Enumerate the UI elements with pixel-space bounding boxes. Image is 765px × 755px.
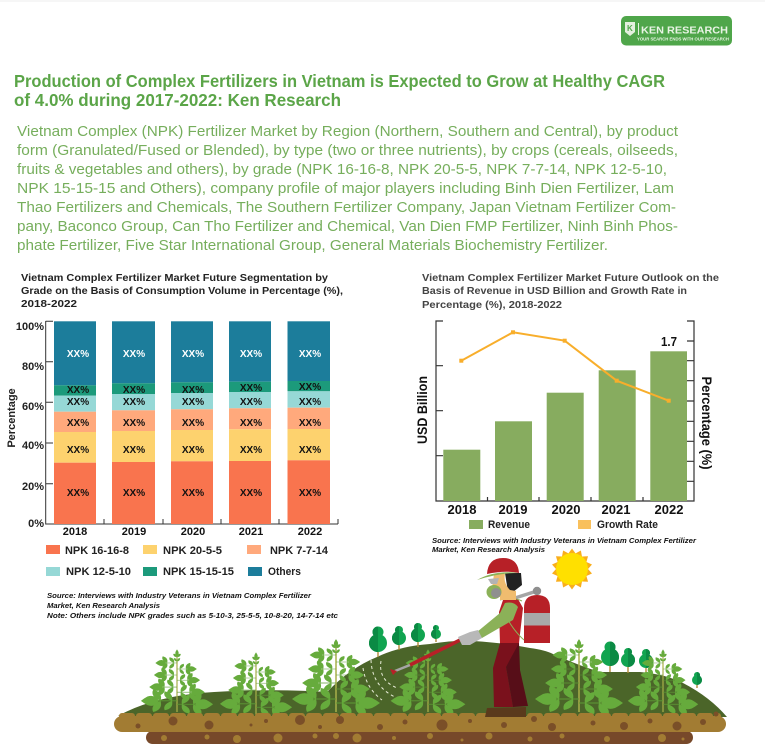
stacked bar 2018: XX% [67,349,89,360]
y axis with percentage labels: 20% [22,481,44,493]
title: of 4.0% during 2017-2022: Ken Research [14,90,341,110]
year labels: 2018 [448,502,476,517]
axes and ticks [436,321,694,501]
stacked bar 2021: XX% [240,397,262,408]
value label 1.7: 1.7 [661,334,677,349]
source note: segmentation: Source: Interviews with Industry Veterans in Vietnam Complex Fertilizer [47,591,312,600]
stacked bar 2020: 2020 [181,526,205,538]
source note: segmentation: Note: Others include NPK grades such as 5-10-3, 25-5-5, 10-8-20, 14-7-14 etc [47,611,339,620]
arm [477,602,518,638]
stacked bar 2019: 2019 [122,526,146,538]
source note: segmentation [47,591,339,620]
stacked bar 2019 [112,321,155,538]
boots [485,707,526,717]
source note: outlook: Source: Interviews with Industry Veterans in Vietnam Complex Fertilizer [432,536,697,545]
stacked bar 2019: XX% [123,385,145,396]
stacked bar 2022: XX% [299,349,321,360]
stacked bar 2021: XX% [240,349,262,360]
description text block: fruits & vegetables and others), by grade (NPK 16-16-8, NPK 20-5-5, NPK 7-7-14, NPK 12-5-10, [17,161,667,178]
trousers [493,643,528,707]
stacked bar 2020: XX% [182,488,204,499]
backpack tank [515,587,550,643]
stacked bar 2018: XX% [67,445,89,456]
legend: NPK grades: Others [268,566,301,578]
stacked bar 2022 [288,321,330,538]
torso [499,599,523,643]
stacked bar 2022: XX% [299,445,321,456]
description text block: pany, Baconco Group, Can Tho Fertilizer and Chemical, Van Dien FMP Fertilizer, Ninh Binh Phos- [17,218,678,235]
stacked bar 2022: 2022 [298,526,322,538]
lower soil layer [146,731,693,744]
stacked bar 2022: XX% [299,488,321,499]
year labels: 2019 [499,502,527,517]
stacked bar 2019: XX% [123,397,145,408]
crop plants [141,639,698,718]
logo: Ken Research: K [627,24,633,33]
year labels: 2021 [602,502,630,517]
illustration: farmer spraying crops on hill [114,548,727,744]
stacked bar 2018 [54,321,96,538]
legend: NPK grades: NPK 7-7-14 [270,545,329,557]
y axis with percentage labels: 60% [22,401,44,413]
y axis with percentage labels: 100% [16,321,44,333]
legend: revenue and growth rate: Growth Rate [597,519,658,531]
stacked bar 2019: XX% [123,488,145,499]
head [477,558,522,600]
hill [118,641,727,717]
stacked bar 2021: XX% [240,488,262,499]
glove [458,630,482,645]
legend: NPK grades: NPK 20-5-5 [163,545,222,557]
stacked bar 2020: XX% [182,397,204,408]
description text block: NPK 15-15-15 and Others), company profile of major players including Binh Dien Fertilizer, Lam [17,180,674,197]
chart heading: outlook: Basis of Revenue in USD Billion and Growth Rate in [422,285,687,297]
stacked bar 2020: XX% [182,445,204,456]
axis title: Percentage: Percentage (%) [699,376,715,470]
stacked bar 2018: XX% [67,418,89,429]
title [14,71,665,110]
chart heading: segmentation [21,272,343,310]
top edge shading [0,0,765,2]
legend: revenue and growth rate: Revenue [488,519,530,531]
logo: Ken Research: KEN RESEARCH [641,24,728,36]
panel: revenue and growth combo chart [414,272,719,554]
year labels [448,502,683,517]
revenue bars [443,351,687,501]
stacked bar 2020: XX% [182,349,204,360]
stacked bar 2018: XX% [67,488,89,499]
description text block [17,123,679,254]
legend: revenue and growth rate [469,519,658,531]
chart heading: segmentation: Grade on the Basis of Consumption Volume in Percentage (%), [21,285,343,297]
year labels: 2022 [655,502,683,517]
stacked bar 2018: 2018 [63,526,87,538]
chart heading: outlook: Vietnam Complex Fertilizer Market Future Outlook on the [422,272,719,284]
y axis with percentage labels: Percentage [6,388,18,448]
stacked bar 2021: XX% [240,445,262,456]
stacked bar 2022: XX% [299,382,321,393]
chart heading: outlook [422,272,719,311]
description text block: form (Granulated/Fused or Blended), by type (two or three nutrients), by crops (cereals, oilseeds, [17,142,678,159]
source note: outlook [432,536,697,554]
description text block: phate Fertilizer, Five Star International Group, General Materials Biochemistry Fertilizer. [17,237,608,254]
source note: outlook: Market, Ken Research Analysis [432,545,545,554]
stacked bar 2020 [171,321,213,538]
y axis with percentage labels: 40% [22,440,44,452]
growth rate line [459,330,671,403]
panel: segmentation stacked bar chart [6,272,343,620]
logo: Ken Research [621,16,732,46]
stacked bar 2020: XX% [182,418,204,429]
stacked bar 2021 [229,321,271,538]
chart heading: segmentation: 2018-2022 [21,298,77,310]
upper soil layer [114,712,726,732]
stacked bar 2018: XX% [67,385,89,396]
source note: segmentation: Market, Ken Research Analysis [47,601,160,610]
title: Production of Complex Fertilizers in Vietnam is Expected to Grow at Healthy CAGR [14,71,665,91]
trees [369,623,702,688]
description text block: Thao Fertilizers and Chemicals, The Southern Fertilizer Company, Japan Vietnam Fertilizer Com- [17,199,676,216]
legend: NPK grades [46,545,329,578]
stacked bar 2019: XX% [123,349,145,360]
stacked bar 2022: XX% [299,418,321,429]
y axis with percentage labels: 80% [22,361,44,373]
spray wand [390,636,468,675]
stacked bar 2019: XX% [123,445,145,456]
sun [552,548,592,590]
stacked bar 2020: XX% [182,385,204,396]
description text block: Vietnam Complex (NPK) Fertilizer Market by Region (Northern, Southern and Central), by product [17,123,679,140]
logo: Ken Research: YOUR SEARCH ENDS WITH OUR RESEARCH [637,36,729,42]
stacked bar 2022: XX% [299,397,321,408]
stacked bar 2021: XX% [240,418,262,429]
farmer [390,558,550,717]
strap [500,598,524,640]
stacked bar 2019: XX% [123,418,145,429]
spray arcs [363,660,397,700]
y axis with percentage labels: 0% [28,518,44,530]
chart heading: outlook: Percentage (%), 2018-2022 [422,299,562,311]
stacked bar 2018: XX% [67,397,89,408]
axis title: USD Billion: USD Billion [414,376,430,444]
y axis with percentage labels [6,321,338,530]
legend: NPK grades: NPK 12-5-10 [66,566,131,578]
legend: NPK grades: NPK 16-16-8 [65,545,129,557]
chart heading: segmentation: Vietnam Complex Fertilizer Market Future Segmentation by [21,272,328,284]
legend: NPK grades: NPK 15-15-15 [163,566,234,578]
year labels: 2020 [552,502,580,517]
stacked bar 2021: XX% [240,383,262,394]
stacked bar 2021: 2021 [239,526,263,538]
